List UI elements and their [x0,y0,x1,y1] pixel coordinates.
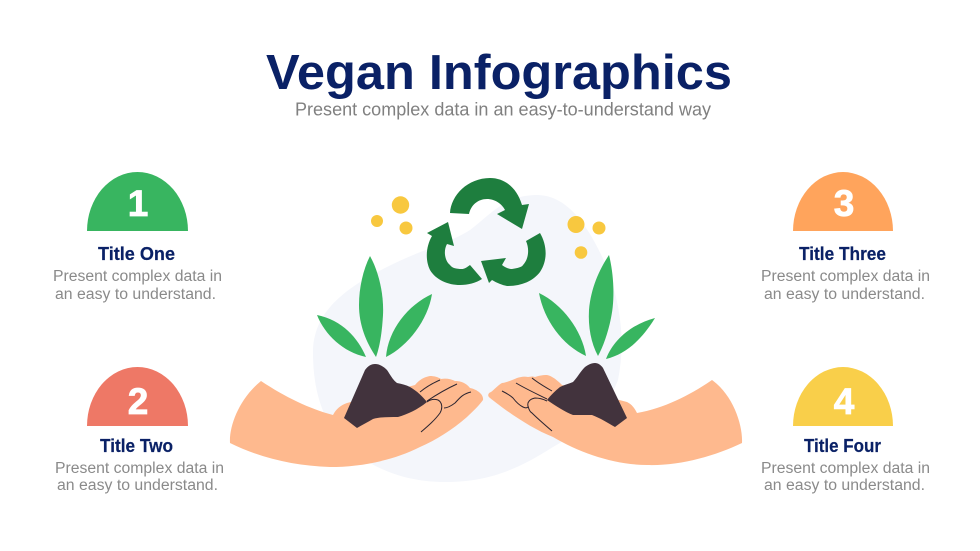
heading: Title Three: Title Three [799,244,886,264]
subtitle: Present complex data in an easy-to-understand way [295,100,711,120]
badge 1: 1 [128,183,148,224]
text block 3: an easy to understand. [764,286,925,303]
text block 4: Present complex data in [761,460,930,477]
badge 4: 4 [834,381,855,422]
icon: left yellow dots [371,196,412,234]
text block 1: an easy to understand. [55,286,216,303]
text block 4 [761,460,930,494]
icon: right yellow dots [568,216,606,259]
badge 4 [793,367,893,426]
text block 2: an easy to understand. [57,477,218,494]
text block 2 [55,460,224,494]
heading: Title Two: Title Two [100,436,173,456]
panel: item 3 [761,172,930,303]
left plant leaves [317,256,432,357]
text block 1: Present complex data in [53,268,222,285]
panel: item 2 [55,367,224,494]
title: Vegan Infographics [266,45,732,100]
panel: item 1 [53,172,222,303]
text block 3: Present complex data in [761,268,930,285]
heading: Title Four: Title Four [804,436,881,456]
icon: recycle symbol [427,178,546,286]
right hand [488,363,742,465]
text block 2: Present complex data in [55,460,224,477]
badge 3: 3 [834,183,854,224]
badge 2: 2 [128,381,148,422]
right plant leaves [539,255,655,359]
text block 1 [53,268,222,303]
left hand [230,364,483,467]
central illustration [230,178,742,482]
badge 2 [87,367,188,426]
panel: item 4 [761,367,930,494]
heading: Title One: Title One [98,244,175,264]
badge 3 [793,172,893,231]
text block 4: an easy to understand. [764,477,925,494]
badge 1 [87,172,188,231]
text block 3 [761,268,930,303]
background blob [313,195,622,482]
